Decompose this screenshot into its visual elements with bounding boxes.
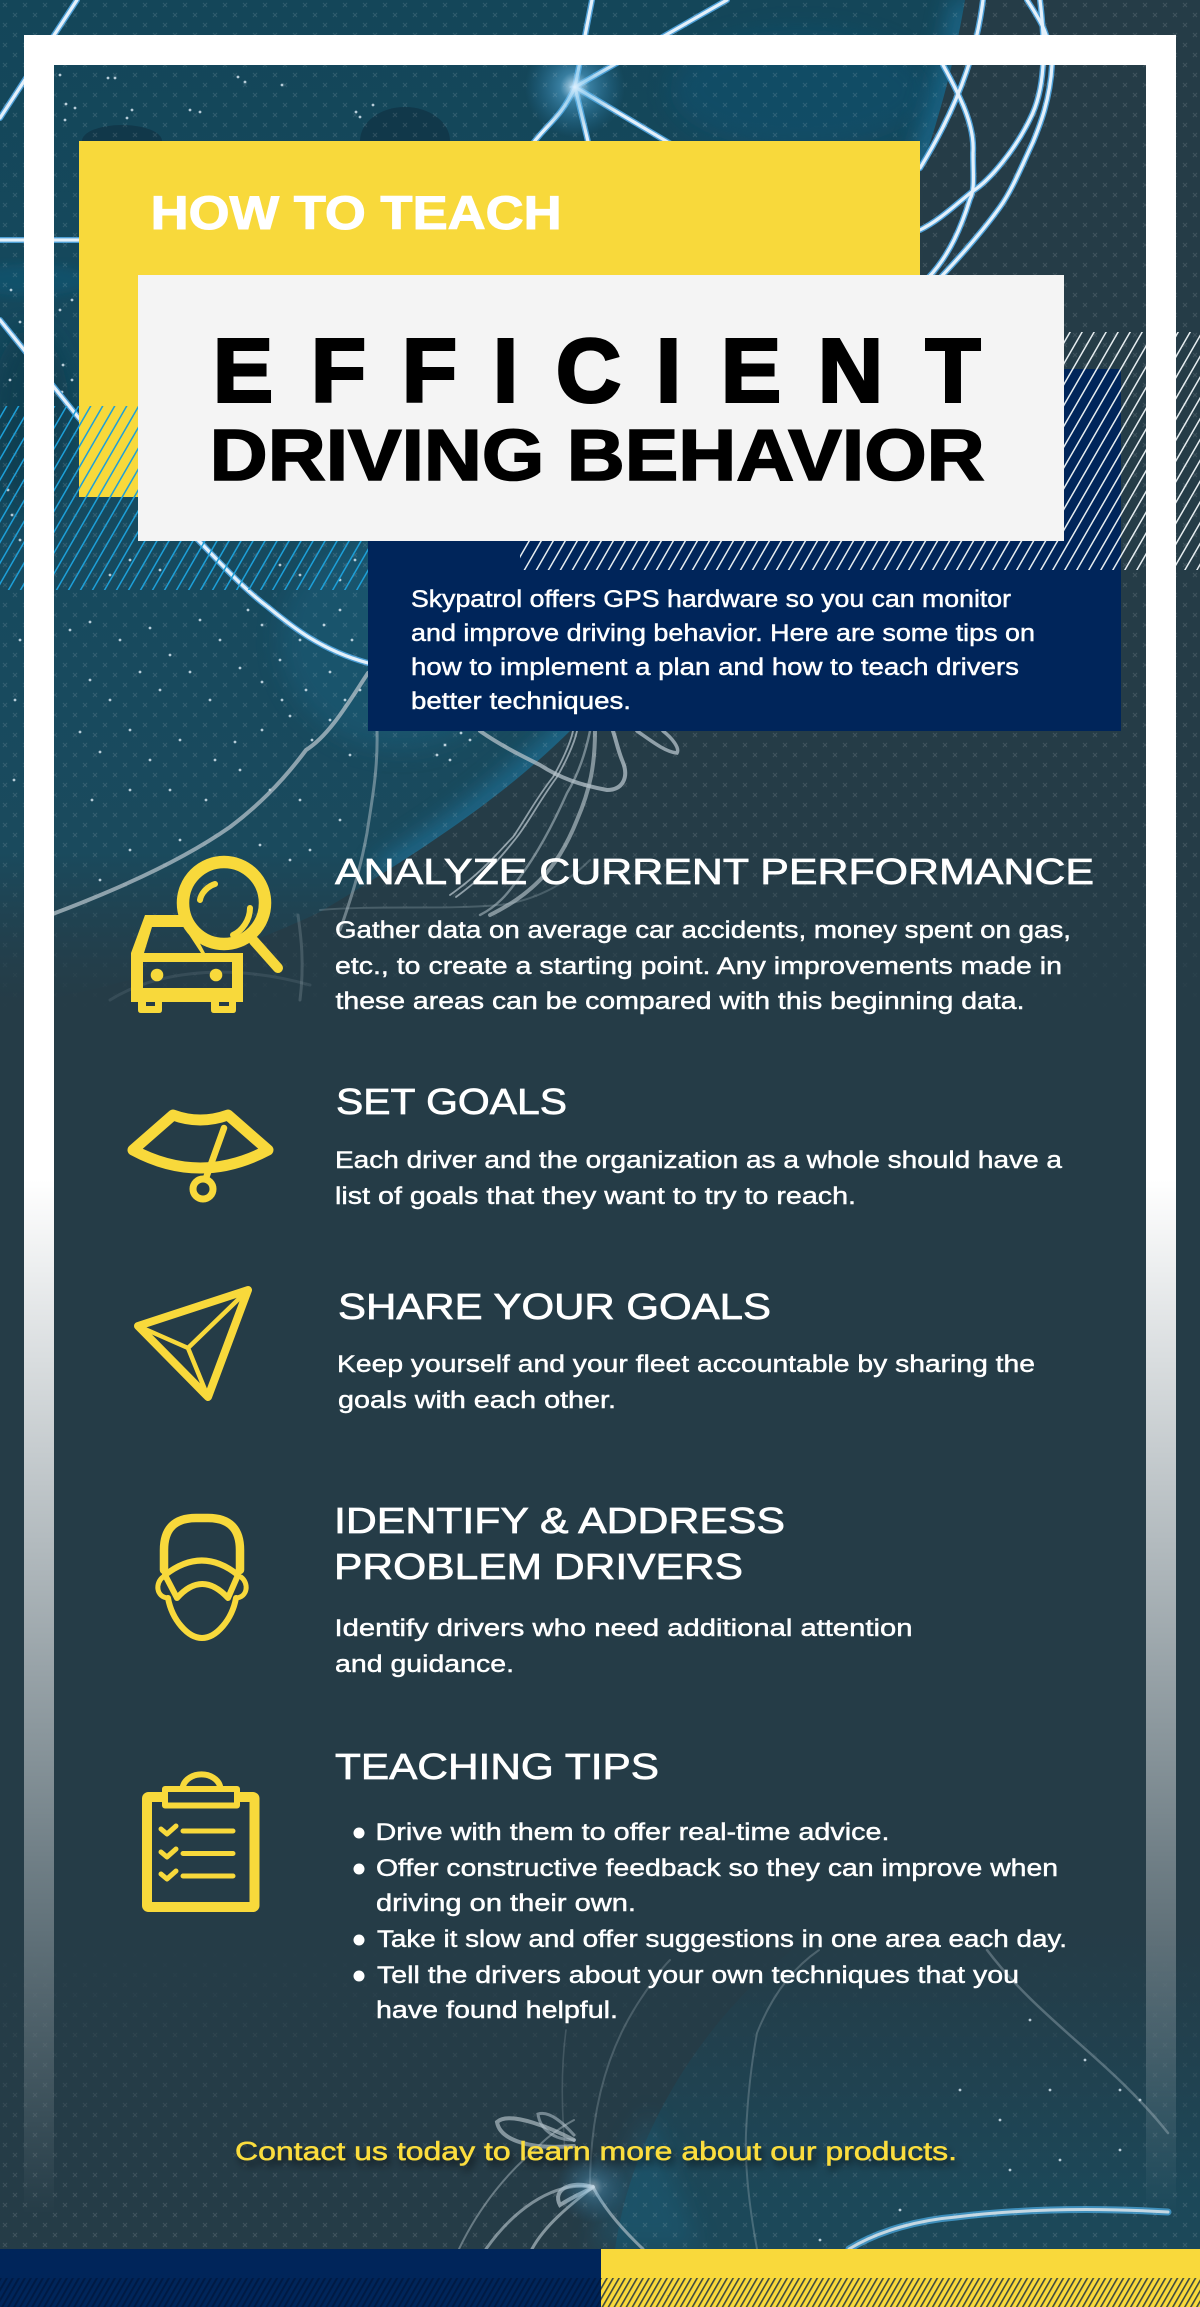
section: identify and address problem drivers bbox=[158, 1500, 913, 1678]
intro text: and improve driving behavior. Here are some tips on bbox=[411, 620, 1035, 647]
body text bbox=[334, 1615, 912, 1678]
intro text: how to implement a plan and how to teach drivers bbox=[411, 654, 1019, 681]
panel: yellow title bbox=[79, 141, 920, 498]
intro text bbox=[411, 586, 1035, 715]
heading: TEACHING TIPS bbox=[335, 1746, 659, 1787]
body text: etc., to create a starting point. Any improvements made in bbox=[335, 953, 1062, 980]
heading: PROBLEM DRIVERS bbox=[334, 1546, 743, 1587]
background bright curve: bottom right bbox=[849, 2209, 1168, 2249]
icon: car with magnifier bbox=[131, 862, 278, 1013]
body text bbox=[335, 1147, 1063, 1210]
body text: Keep yourself and your fleet accountable by sharing the bbox=[337, 1351, 1035, 1378]
body text: Identify drivers who need additional attention bbox=[334, 1615, 912, 1642]
body text: Each driver and the organization as a whole should have a bbox=[335, 1147, 1063, 1174]
intro text: Skypatrol offers GPS hardware so you can monitor bbox=[411, 586, 1011, 613]
footer yellow hatch bbox=[601, 2278, 1200, 2307]
background grey lines: under intro bbox=[50, 673, 678, 1000]
bullet list: driving on their own. bbox=[376, 1890, 636, 1917]
background globe: top bbox=[0, 0, 965, 1010]
heading: SET GOALS bbox=[336, 1081, 567, 1122]
heading: ANALYZE CURRENT PERFORMANCE bbox=[335, 851, 1094, 892]
background globe: bottom bbox=[595, 2062, 1200, 2249]
body text bbox=[335, 917, 1071, 1015]
call to action: Contact us today to learn more about our products. bbox=[235, 2136, 957, 2166]
bullet list bbox=[354, 1819, 1067, 2024]
bullet list: Take it slow and offer suggestions in one area each day. bbox=[377, 1926, 1067, 1953]
icon: gauge bbox=[133, 1115, 268, 1199]
background star glow: top bbox=[525, 37, 625, 137]
title: efficient: EFFICIENT bbox=[213, 322, 980, 422]
section: set goals bbox=[133, 1081, 1063, 1210]
background grey lines: bottom bbox=[459, 1950, 1168, 2249]
bullet list: have found helpful. bbox=[376, 1997, 618, 2024]
icon: paper plane bbox=[138, 1290, 248, 1397]
yellow panel hatch bbox=[79, 406, 139, 498]
icon: driver head with cap bbox=[158, 1518, 246, 1638]
background light lines: top bbox=[0, 0, 1052, 663]
body text: these areas can be compared with this beginning data. bbox=[336, 988, 1024, 1015]
body text: list of goals that they want to try to reach. bbox=[335, 1183, 856, 1210]
heading: SHARE YOUR GOALS bbox=[338, 1286, 771, 1327]
title: driving behavior: DRIVING BEHAVIOR bbox=[210, 416, 985, 496]
heading bbox=[334, 1500, 785, 1587]
hatch band: left blue bbox=[0, 406, 368, 590]
bullet list: Offer constructive feedback so they can improve when bbox=[376, 1855, 1058, 1882]
title: how to teach: HOW TO TEACH bbox=[151, 186, 562, 239]
bullet list: Tell the drivers about your own techniques that you bbox=[377, 1962, 1019, 1989]
footer navy block bbox=[0, 2249, 601, 2307]
hatch band: right white bbox=[520, 332, 1200, 570]
footer band bbox=[0, 2249, 1200, 2307]
section: share your goals bbox=[138, 1286, 1035, 1414]
icon: clipboard checklist bbox=[147, 1774, 254, 1907]
footer yellow block bbox=[601, 2249, 1200, 2307]
body text: Gather data on average car accidents, money spent on gas, bbox=[335, 917, 1071, 944]
section: analyze current performance bbox=[131, 851, 1094, 1015]
body text: and guidance. bbox=[335, 1651, 514, 1678]
panel: white title bbox=[138, 275, 1064, 541]
heading: IDENTIFY & ADDRESS bbox=[334, 1500, 785, 1541]
bullet list: Drive with them to offer real-time advice. bbox=[376, 1819, 890, 1846]
panel: navy intro bbox=[368, 369, 1121, 731]
body text: goals with each other. bbox=[338, 1387, 616, 1414]
body text bbox=[337, 1351, 1035, 1414]
background star glow: bottom bbox=[557, 2151, 629, 2223]
footer navy hatch bbox=[0, 2278, 601, 2307]
section: teaching tips bbox=[147, 1746, 1067, 2024]
intro text: better techniques. bbox=[411, 688, 631, 715]
